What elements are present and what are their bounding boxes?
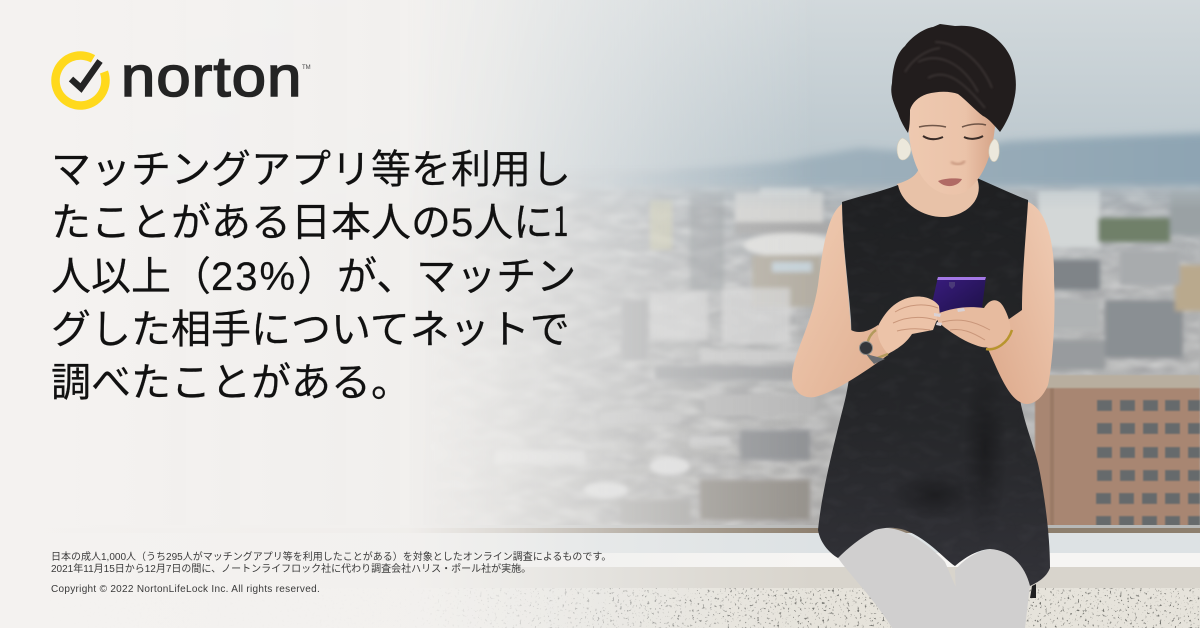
survey note: 日本の成人1,000人（うち295人がマッチングアプリ等を利用したことがある）を対象としたオンライン調査によるものです。 — [51, 552, 611, 563]
rooftop ledge — [0, 525, 1200, 628]
hands holding the phone — [877, 297, 1011, 354]
headline: 人以上（23%）が、マッチン — [51, 244, 576, 302]
smartphone — [930, 277, 986, 316]
norton logo — [51, 44, 311, 110]
sky — [0, 0, 1200, 190]
copyright: Copyright © 2022 NortonLifeLock Inc. All rights reserved. — [51, 584, 320, 595]
face — [908, 80, 996, 195]
earrings — [897, 138, 999, 162]
eyes, eyebrows, nose and lips — [919, 124, 986, 186]
right arm — [986, 202, 1055, 404]
woman — [792, 24, 1060, 628]
survey note: 2021年11月15日から12月7日の間に、ノートンライフロック社に代わり調査会社ハリス・ポール社が実施。 — [51, 564, 531, 575]
logo checkmark — [71, 61, 100, 88]
headline: 1 — [553, 190, 569, 248]
survey note — [51, 551, 611, 575]
headline: マッチングアプリ等を利用し — [51, 137, 571, 195]
headline — [51, 137, 576, 408]
wrist watch — [860, 330, 888, 364]
neck and chest — [897, 165, 979, 220]
gold bracelet — [986, 330, 1012, 349]
headline: たことがある日本人の5人に — [51, 190, 553, 248]
wordmark: norton — [121, 44, 301, 108]
headline: 調べたことがある。 — [51, 350, 411, 408]
short black hair — [891, 24, 1016, 133]
blurred city — [0, 168, 1200, 528]
legs in grey leggings — [838, 528, 1030, 628]
left arm — [792, 204, 888, 397]
hazy horizon blending sky and city — [0, 165, 1200, 210]
headline: グした相手についてネットで — [51, 297, 570, 355]
distant mountains — [560, 131, 1200, 186]
logo ring — [55, 55, 105, 105]
photo: woman with smartphone on rooftop over city — [421, 0, 1200, 628]
black sleeveless dress — [810, 175, 1060, 598]
trademark: TM — [302, 65, 311, 71]
brown building with windows — [1035, 375, 1200, 527]
